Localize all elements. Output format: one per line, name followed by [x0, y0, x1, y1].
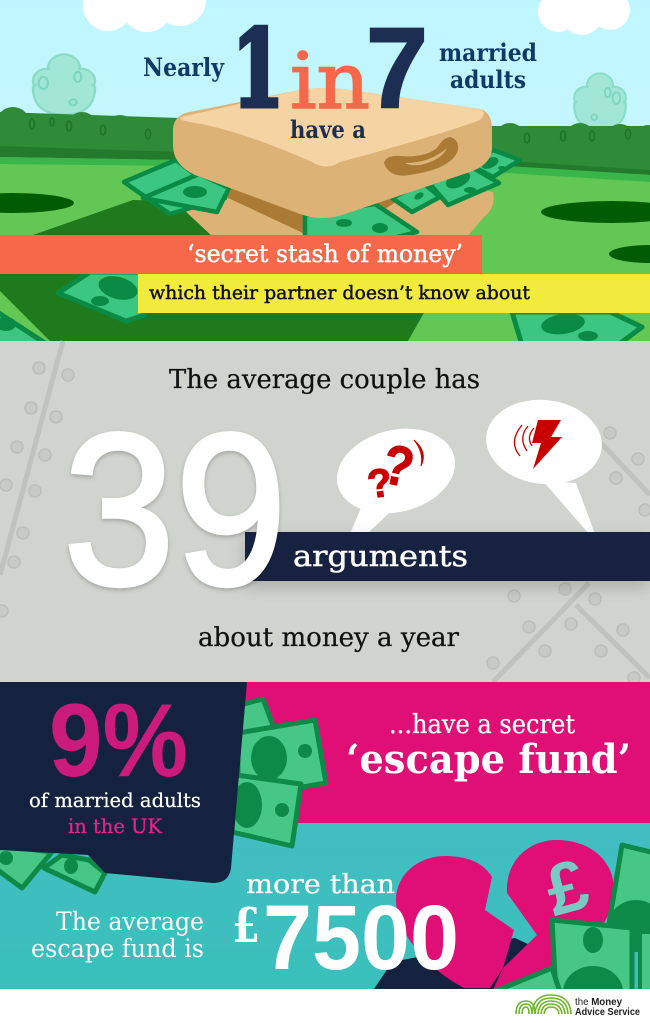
amount: pound 7500: £: [232, 898, 260, 954]
text: the average couple has: The average couple has: [169, 365, 480, 395]
background: pink: [230, 682, 650, 823]
banner: partner: which their partner doesn’t know about: [149, 282, 530, 304]
shadow path: [0, 200, 485, 341]
text: of married adults: of married adults: [29, 788, 201, 812]
sandwich: [124, 88, 520, 240]
sandwich filling: [222, 183, 425, 233]
speech bubble: question marks: [328, 417, 464, 534]
hole left: [0, 193, 74, 213]
bill: lower left: [58, 272, 145, 321]
logo text: the Money: [575, 997, 622, 1008]
stat: 9%: 9%: [49, 683, 188, 799]
metal plate seams: [0, 341, 650, 682]
text: in the UK: in the UK: [68, 814, 163, 838]
stat line: married adults: adults: [450, 65, 526, 94]
banner: partner: [138, 274, 650, 313]
logo text: [575, 997, 640, 1018]
icon: question marks: ?: [377, 432, 420, 499]
bill: bottom left: [0, 310, 48, 345]
stat number: 1: 1: [232, 6, 284, 131]
upper bread: [173, 88, 492, 218]
banner: arguments: arguments: [293, 539, 468, 573]
panel: arguments: [0, 341, 650, 684]
hole right lower: [609, 245, 650, 263]
bills in sandwich: [124, 150, 520, 240]
icon: pound sign: £: [537, 844, 597, 932]
icon: question marks: ?: [365, 460, 395, 507]
logo text: Advice Service: [575, 1007, 640, 1018]
banner: arguments: [245, 532, 650, 581]
panel: escape fund: [0, 682, 650, 1018]
tree right: [574, 73, 626, 130]
ground strip: [0, 157, 650, 182]
banner: secret stash: [0, 235, 482, 274]
panel: hero: [0, 0, 650, 345]
text: have a: have a: [290, 115, 366, 144]
navy shape: [372, 938, 530, 992]
cloud right: [538, 0, 630, 35]
stat line: Nearly: Nearly: [143, 53, 225, 82]
broken heart with money: [374, 840, 650, 989]
bread top face: [180, 88, 484, 166]
banner: secret stash: ‘secret stash of money’: [187, 240, 463, 268]
bill: lower right: [512, 311, 642, 345]
hedge: [0, 107, 650, 178]
speech bubble: lightning: [482, 394, 606, 534]
amount: pound 7500: 7500: [263, 887, 459, 989]
lower bread: [182, 186, 494, 238]
text: the average escape fund is: escape fund is: [31, 934, 204, 963]
bill: bottom: [493, 968, 560, 992]
stat line: married adults: [439, 38, 537, 94]
text: have a secret: ...have a secret: [389, 710, 576, 740]
bill spots: [232, 736, 312, 828]
stat word: in: in: [290, 37, 370, 127]
bill: front right: [550, 918, 634, 989]
icon: lightning bolt: [532, 420, 562, 469]
navy panel: [0, 682, 247, 883]
background: teal: [0, 682, 650, 989]
heart: right half: [493, 840, 614, 990]
logo mark: [516, 995, 571, 1014]
icon: sound arcs: [514, 425, 534, 456]
bill: back right: [608, 845, 650, 952]
ground: [0, 157, 650, 341]
hedge curls: [30, 118, 630, 143]
money pile: left bills: [0, 845, 105, 892]
rivets: [0, 362, 650, 684]
text: escape fund: ‘escape fund’: [346, 736, 631, 783]
tree left: [33, 54, 95, 115]
stat number: 7: 7: [366, 5, 428, 132]
money pile: upper bills: [232, 699, 326, 846]
bill: front right edge: [640, 932, 650, 995]
heart: left half: [396, 856, 514, 988]
stat line: married adults: married: [439, 38, 537, 67]
cloud left: [83, 0, 206, 32]
text: about money a year: about money a year: [198, 623, 460, 653]
hole right: [541, 201, 650, 223]
text: more than: more than: [246, 870, 395, 900]
big number: 39: 39: [63, 388, 287, 630]
footer: [0, 989, 650, 1023]
handle: [384, 137, 458, 176]
text: the average escape fund is: [31, 907, 204, 963]
text: the average escape fund is: The average: [56, 907, 204, 936]
hedge shadow band: [0, 146, 650, 178]
